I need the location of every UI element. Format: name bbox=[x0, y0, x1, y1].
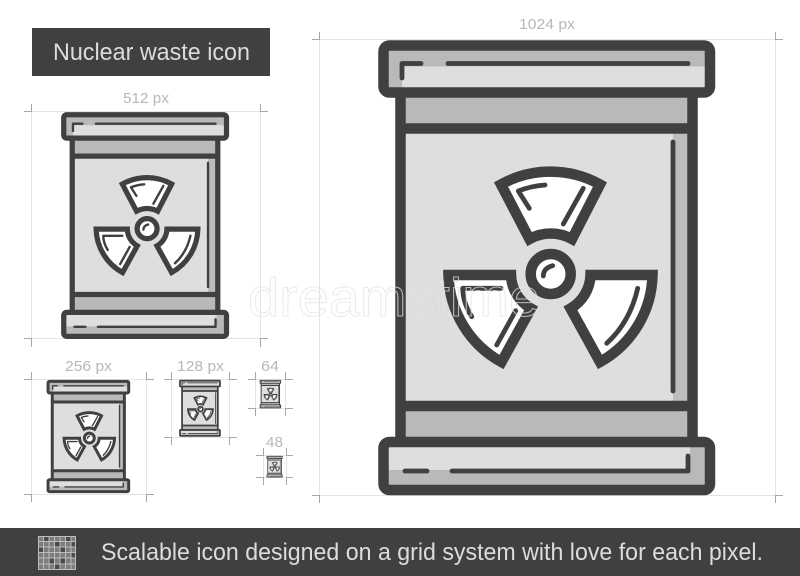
label: 1024 px: 1024 px bbox=[519, 16, 576, 33]
label: 256 px: 256 px bbox=[65, 358, 113, 375]
watermark: dreamstime bbox=[248, 268, 540, 328]
guide: 128 px bbox=[164, 372, 237, 445]
guide: 48 px bbox=[256, 448, 293, 485]
guide: 512 px bbox=[24, 104, 268, 347]
icon: nuclear waste barrel 256 px bbox=[48, 381, 129, 492]
icon: nuclear waste barrel 128 px bbox=[180, 381, 220, 436]
icon: nuclear waste barrel 512 px bbox=[64, 115, 227, 336]
footer bar bbox=[0, 528, 800, 576]
guide: 1024 px bbox=[312, 32, 783, 503]
guide: 256 px bbox=[24, 372, 154, 502]
icon: pixel grid bbox=[38, 536, 76, 570]
label: 512 px: 512 px bbox=[123, 90, 170, 107]
label: 48: 48 bbox=[266, 434, 283, 451]
icon: nuclear waste barrel 1024 px bbox=[384, 46, 710, 490]
title banner bbox=[32, 28, 270, 76]
footer text: Scalable icon designed on a grid system with love for each pixel. bbox=[101, 539, 763, 566]
title banner: Nuclear waste icon bbox=[53, 39, 250, 66]
icon: nuclear waste barrel 64 px bbox=[260, 380, 281, 408]
icon: nuclear waste barrel 48 px bbox=[267, 456, 282, 477]
label: 128 px: 128 px bbox=[177, 358, 225, 375]
label: 64: 64 bbox=[261, 358, 279, 375]
guide: 64 px bbox=[248, 372, 293, 416]
